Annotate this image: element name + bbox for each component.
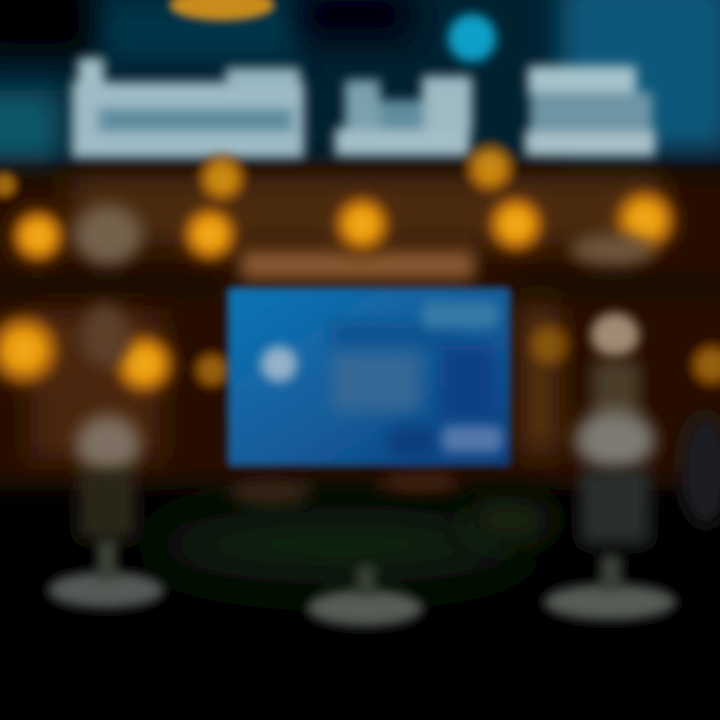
card logo top right [422,302,498,328]
title banner [72,58,655,158]
card number text block [332,352,420,412]
lamps: warm string lights [0,137,720,412]
credit card [228,288,510,466]
card dark lower area [386,426,438,458]
figures: pale silhouettes upper row [74,205,654,367]
panel: dark foliage ground [0,473,720,720]
icon: cyan glow above title [448,14,496,62]
card emblem [261,346,297,382]
figure: right statue [544,313,720,620]
card top band [330,322,460,350]
card dark corner [440,345,495,420]
icon: top lamp [170,0,274,20]
figure: centre statue [307,565,423,626]
card logo bottom right [442,426,502,452]
panel: night sky header [0,0,720,165]
figure: left statue [48,415,164,608]
card body [228,288,510,466]
panel: warm building background [0,170,720,490]
